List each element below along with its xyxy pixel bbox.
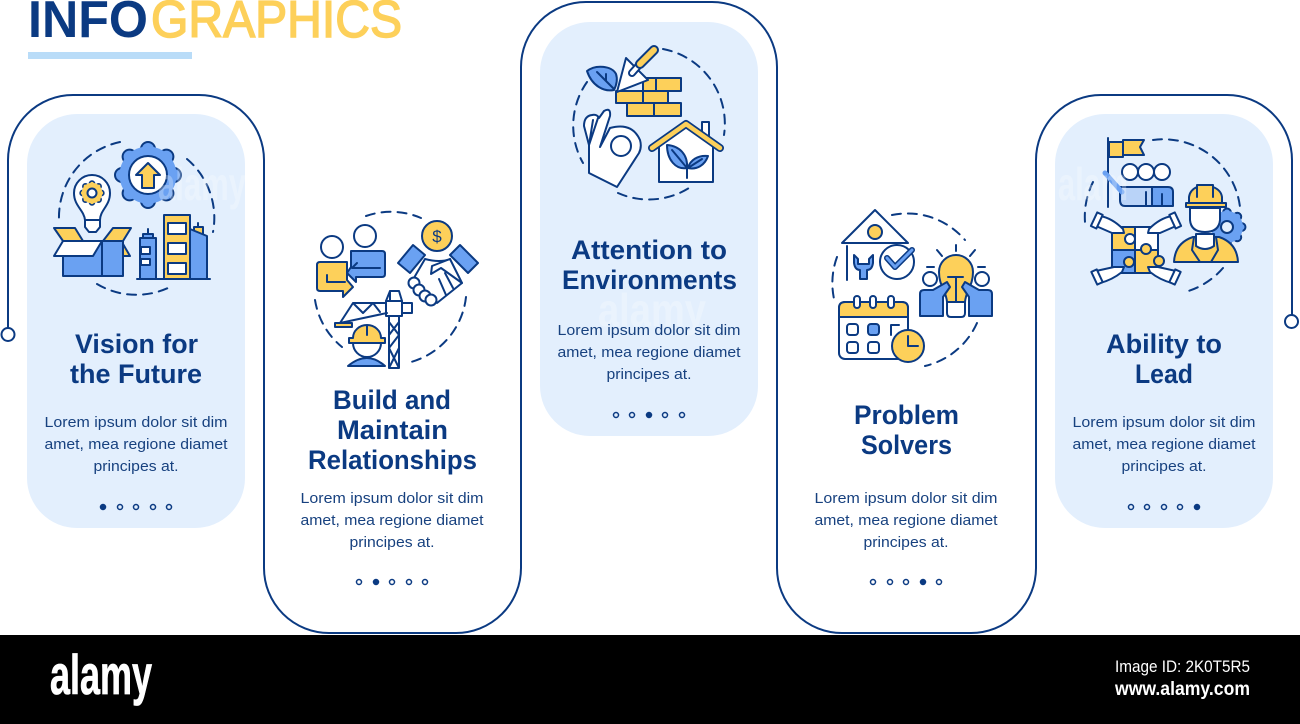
heading bbox=[70, 329, 202, 389]
footer band bbox=[0, 635, 1300, 724]
pagination dots bbox=[870, 580, 942, 584]
pagination dots bbox=[1128, 504, 1200, 510]
body text bbox=[300, 490, 484, 551]
icon: relationships bbox=[315, 212, 478, 368]
title bbox=[28, 0, 402, 49]
panel: build and maintain relationships bbox=[300, 212, 484, 585]
body text bbox=[558, 322, 741, 383]
body text: amet, mea regione diamet bbox=[44, 436, 228, 453]
heading bbox=[854, 400, 959, 460]
heading: Environments bbox=[562, 265, 737, 295]
heading: Problem bbox=[854, 400, 959, 430]
body text: amet, mea regione diamet bbox=[814, 512, 998, 529]
panel: ability to lead bbox=[1055, 114, 1273, 528]
icon: vision bbox=[54, 142, 214, 295]
heading: Lead bbox=[1135, 359, 1193, 389]
watermark: alamy bbox=[158, 158, 246, 210]
heading: Build and bbox=[333, 385, 451, 415]
body text: principes at. bbox=[350, 534, 434, 551]
heading: Vision for bbox=[75, 329, 198, 359]
icon: relationships: $ bbox=[432, 227, 442, 246]
footer logo: alamy bbox=[50, 643, 152, 706]
icon: problem solving bbox=[832, 210, 992, 366]
watermark: alam bbox=[1058, 158, 1128, 210]
watermark: alamy bbox=[598, 284, 706, 336]
panel: problem solvers bbox=[814, 210, 998, 584]
body text: Lorem ipsum dolor sit dim bbox=[558, 322, 740, 339]
body text bbox=[1072, 414, 1256, 475]
heading: Ability to bbox=[1106, 329, 1222, 359]
body text bbox=[814, 490, 998, 551]
heading: Solvers bbox=[861, 430, 952, 460]
panel: vision for the future bbox=[27, 114, 246, 528]
pagination dots bbox=[614, 412, 684, 418]
heading bbox=[1106, 329, 1222, 389]
body text: principes at. bbox=[606, 366, 692, 383]
body text: Lorem ipsum dolor sit dim bbox=[44, 414, 228, 431]
panel: attention to environments bbox=[540, 22, 758, 436]
icon: leadership bbox=[1085, 138, 1245, 292]
website: www.alamy.com bbox=[1114, 679, 1250, 700]
body text: principes at. bbox=[94, 458, 178, 475]
body text bbox=[44, 414, 228, 475]
body text: Lorem ipsum dolor sit dim bbox=[814, 490, 998, 507]
body text: amet, mea regione diamet bbox=[300, 512, 484, 529]
title underline bar bbox=[28, 52, 192, 59]
heading: Relationships bbox=[308, 445, 477, 475]
body text: Lorem ipsum dolor sit dim bbox=[1072, 414, 1256, 431]
body text: amet, mea regione diamet bbox=[558, 344, 741, 361]
body text: amet, mea regione diamet bbox=[1072, 436, 1256, 453]
pagination dots bbox=[100, 504, 172, 510]
heading bbox=[308, 385, 477, 475]
heading: Maintain bbox=[337, 415, 448, 445]
icon: environments bbox=[573, 49, 725, 200]
body text: principes at. bbox=[864, 534, 948, 551]
heading: Attention to bbox=[571, 235, 727, 265]
image id: Image ID: 2K0T5R5 bbox=[1115, 657, 1250, 676]
heading bbox=[562, 235, 737, 295]
pagination dots bbox=[356, 580, 428, 584]
body text: Lorem ipsum dolor sit dim bbox=[300, 490, 484, 507]
body text: principes at. bbox=[1122, 458, 1206, 475]
heading: the Future bbox=[70, 359, 202, 389]
